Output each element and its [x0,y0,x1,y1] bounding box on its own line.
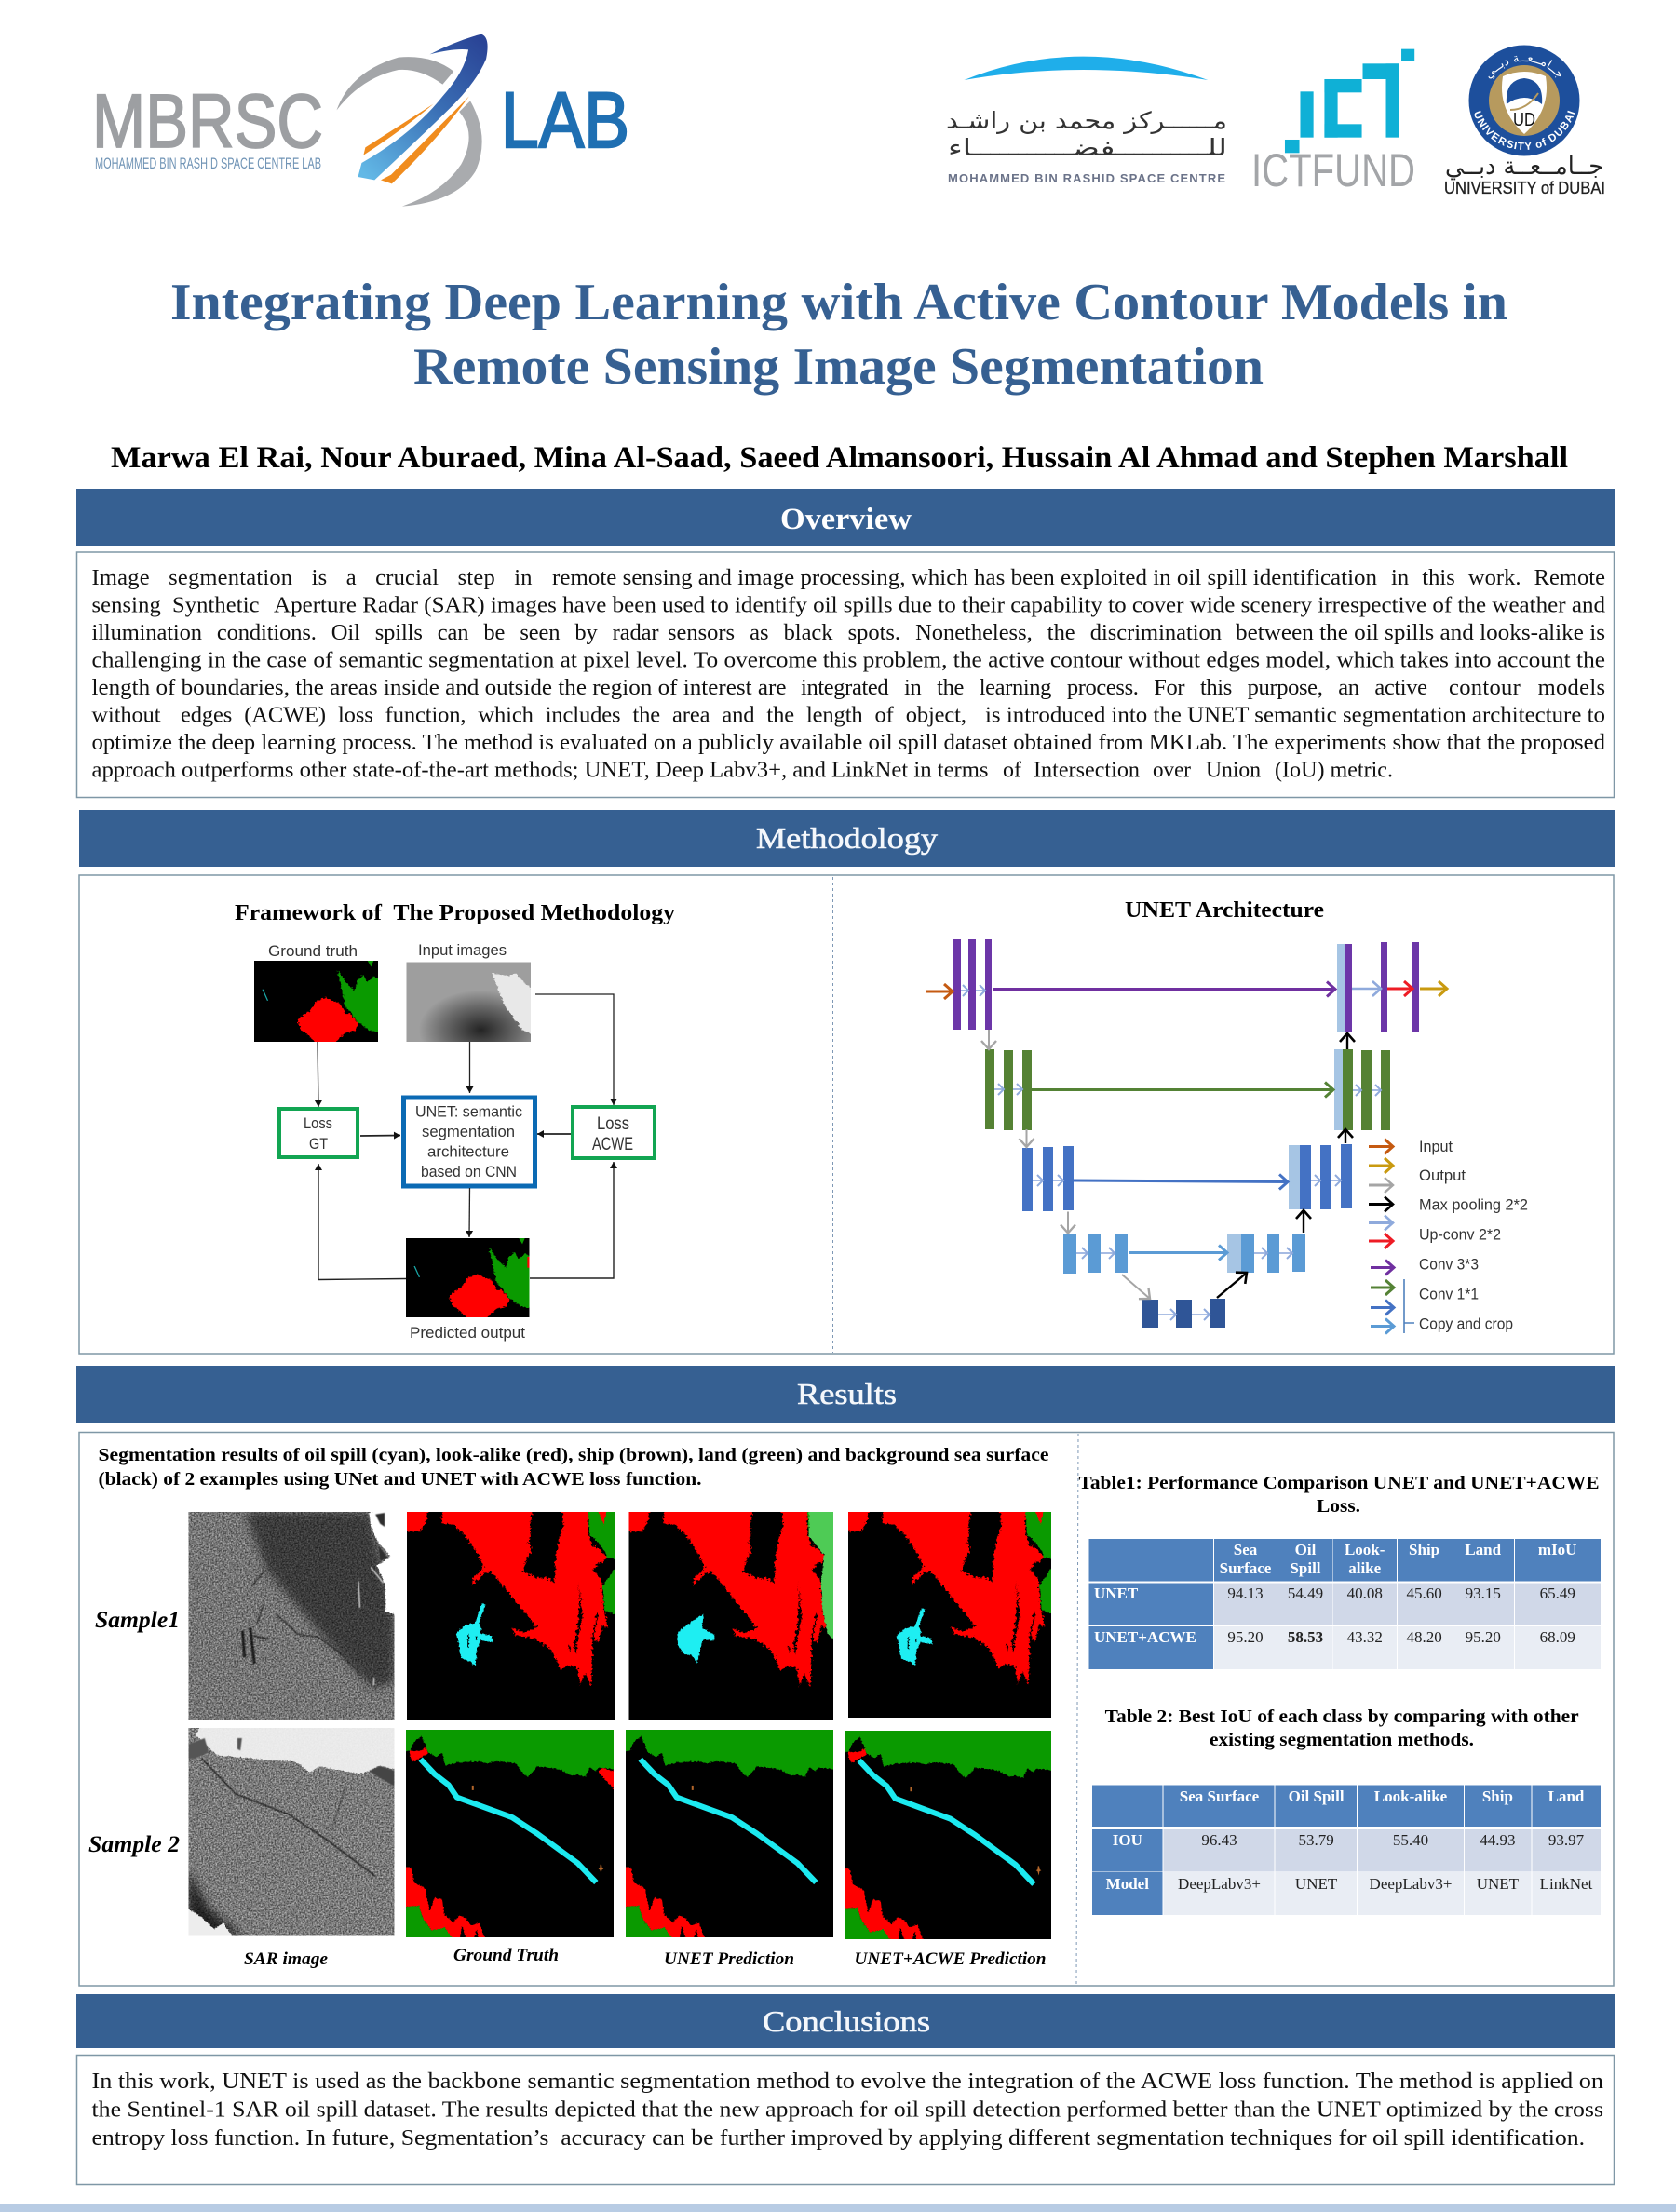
panel: overview text: challenging in the case of semantic segmentation at pixel level. To overcome this problem, the active contour without edges model, which takes into account the [91,648,1605,672]
panel: conclusions text: In this work, UNET is used as the backbone semantic segmentation method to evolve the integration of the ACWE loss function. The method is applied on [91,2069,1603,2094]
diagram: UNET architecture [926,939,1528,1333]
caption: segmentation results [99,1445,1048,1490]
panel: overview text: remote sensing and image processing, which has been exploited in oil spill identification [552,565,1377,590]
image: input SAR image [406,963,531,1042]
labels: image columns: UNET+ACWE Prediction [855,1949,1047,1969]
label: predicted output: Predicted output [410,1324,525,1342]
table 1: performance comparison: UNET [1094,1585,1139,1602]
panel: overview text [76,552,1615,797]
panel: overview text: between the oil spills and looks-alike is [1236,620,1605,645]
title: Remote Sensing Image Segmentation [413,338,1264,396]
panel: overview text: integrated in the learning process. For this purpose, an active [801,675,1427,700]
logo: University of Dubai: UNIVERSITY of DUBAI [1475,110,1575,150]
box: Loss ACWE: Loss [597,1114,629,1134]
box: UNET semantic segmentation architecture [404,1098,534,1186]
table 2: best IoU of each class: Look-alike [1374,1787,1448,1805]
table 2: best IoU of each class: 93.97 [1548,1831,1585,1849]
table 2: best IoU of each class: Model [1106,1875,1149,1893]
image: sample 2 UNET prediction [626,1730,833,1937]
labels: image columns: Ground Truth [453,1946,559,1965]
logo: Mohammed Bin Rashid Space Centre [946,57,1227,185]
panel: conclusions text: entropy loss function. In future, Segmentation’s accuracy can be further improved by applying different segmentation techniques for oil spill identification. [91,2125,1585,2151]
logo: MBRSC Lab [92,34,629,207]
table 2: best IoU of each class: 55.40 [1393,1831,1428,1849]
panel: overview text: sensors as black spots. Nonetheless, the discrimination [668,620,1222,645]
caption: segmentation results: (black) of 2 examples using UNet and UNET with ACWE loss function. [99,1469,702,1490]
logo: Mohammed Bin Rashid Space Centre: للــــــــــفضـــــــــــاء [948,134,1227,161]
authors: Marwa El Rai, Nour Aburaed, Mina Al-Saad, Saeed Almansoori, Hussain Al Ahmad and Stephen Marshall [111,441,1568,475]
caption: segmentation results: Segmentation results of oil spill (cyan), look-alike (red), ship (brown), land (green) and background sea surface [99,1445,1048,1465]
logo: MBRSC Lab: MOHAMMED BIN RASHID SPACE CENTRE LAB [95,155,321,172]
legend [1369,1138,1528,1333]
table 1: performance comparison: 54.49 [1288,1585,1323,1602]
table 2: best IoU of each class: LinkNet [1540,1875,1593,1893]
legend: Up-conv 2*2 [1419,1225,1501,1244]
box: UNET semantic segmentation architecture: architecture [427,1143,509,1160]
table 2: best IoU of each class: Oil Spill [1289,1787,1345,1805]
table 1: performance comparison: 43.32 [1347,1628,1383,1646]
table 2: best IoU of each class: 44.93 [1480,1831,1516,1849]
heading: table 2: existing segmentation methods. [1210,1730,1474,1750]
heading: table 2: Table 2: Best IoU of each class by comparing with other [1105,1706,1579,1727]
legend: Copy and crop [1419,1315,1513,1333]
legend: Conv 3*3 [1419,1255,1479,1274]
panel: conclusions heading: Conclusions [763,2004,930,2038]
table 1: performance comparison: 93.15 [1466,1585,1501,1602]
bars: bottleneck [1142,1299,1225,1328]
panel: results heading: Results [797,1377,897,1410]
table 1: performance comparison: Land [1465,1541,1502,1558]
panel: conclusions text: the Sentinel-1 SAR oil spill dataset. The results depicted that the new approach for oil spill detection performed better than the UNET optimized by the cross [91,2097,1603,2123]
table 1: performance comparison: 95.20 [1227,1628,1264,1646]
panel: overview text: over [1153,758,1191,782]
panel: methodology frame [79,875,1614,1354]
image: predicted output [406,1238,529,1317]
panel: results frame [79,1432,1614,1986]
table 2: best IoU of each class: DeepLabv3+ [1178,1875,1261,1893]
box: Loss ACWE [573,1107,655,1158]
table 1: performance comparison: Oil [1295,1541,1317,1558]
table 1: performance comparison: 48.20 [1406,1628,1442,1646]
table 1: performance comparison: 65.49 [1540,1585,1575,1602]
logo: ICT Fund [1251,49,1415,196]
panel: overview text: Image segmentation is a crucial step in [91,565,533,590]
table 1: performance comparison: 94.13 [1227,1585,1264,1602]
table 1: performance comparison: 95.20 [1466,1628,1501,1646]
arrows: UNET flow [926,989,1447,1315]
table 1: performance comparison: 45.60 [1406,1585,1442,1602]
table 2: best IoU of each class: 96.43 [1201,1831,1237,1849]
box: Loss ACWE: ACWE [592,1135,633,1154]
table 1: performance comparison: alike [1348,1559,1382,1577]
panel: overview text: contour models [1449,675,1605,700]
heading: framework: Framework of The Proposed Methodology [235,901,675,925]
panel: overview text: (IoU) metric. [1275,758,1393,782]
table 1: performance comparison: 40.08 [1347,1585,1383,1602]
legend: Output [1419,1167,1466,1184]
table 1: performance comparison: mIoU [1538,1541,1576,1558]
panel: overview text: edges (ACWE) loss function, which includes the area and the length of object, [181,702,966,728]
footer band [0,2204,1676,2212]
panel: overview text: of [1003,758,1022,782]
heading: table 2 [1105,1706,1579,1750]
table 2: best IoU of each class: UNET [1295,1875,1338,1893]
panel: overview text: in this work. Remote [1391,565,1605,590]
logo: ICT Fund: ICTFUND [1251,144,1415,196]
logo: MBRSC Lab: MBRSC [92,79,323,164]
logo: University of Dubai [1444,45,1605,197]
label: ground truth: Ground truth [268,942,358,960]
box: UNET semantic segmentation architecture: based on CNN [421,1163,517,1180]
arrows: framework flow [318,994,614,1279]
panel: conclusions text [76,2056,1615,2184]
table 1: performance comparison [1089,1539,1601,1669]
panel: methodology heading: Methodology [756,821,938,855]
logo: University of Dubai: UD [1513,110,1535,130]
panel: results heading [76,1366,1615,1423]
panel: overview text: illumination conditions. Oil spills can be seen by radar [91,620,659,645]
table 1: performance comparison: Ship [1409,1541,1439,1558]
image: sample 1 SAR [188,1512,395,1720]
table 2: best IoU of each class: UNET [1477,1875,1520,1893]
image: sample 1 UNET prediction [629,1512,833,1720]
legend: Conv 1*1 [1419,1285,1479,1303]
table 1: performance comparison: UNET+ACWE [1094,1628,1196,1646]
panel: overview heading [76,489,1615,546]
table 1: performance comparison: Sea [1234,1541,1258,1558]
box: UNET semantic segmentation architecture: UNET: semantic [415,1102,522,1121]
bars: level 2 [985,1049,1390,1130]
panel: overview text: length of boundaries, the areas inside and outside the region of interest are [91,675,787,700]
table 2: best IoU of each class: Sea Surface [1180,1787,1260,1805]
panel: overview text: Union [1206,758,1261,782]
image: sample 2 SAR [188,1728,395,1936]
box: Loss GT: Loss [304,1114,332,1132]
heading: table 1: Loss. [1317,1496,1360,1517]
logo: Mohammed Bin Rashid Space Centre: MOHAMMED BIN RASHID SPACE CENTRE [948,171,1225,185]
image: sample 1 ground truth [407,1512,615,1720]
diagram: framework of the proposed methodology [254,941,655,1342]
table 1: performance comparison: Look- [1345,1541,1385,1558]
legend: Input [1419,1138,1453,1155]
heading: UNET architecture: UNET Architecture [1125,898,1324,923]
panel: methodology heading [79,810,1615,867]
image: sample 1 UNET+ACWE prediction [848,1512,1051,1718]
title [170,274,1507,396]
panel: overview text: is introduced into the UNET semantic segmentation architecture to [985,702,1605,728]
logo: University of Dubai: جــامــعــة دبــي [1445,153,1603,181]
bars: level 3 [1022,1144,1352,1211]
box: Loss GT: GT [309,1135,328,1153]
logo: University of Dubai: جــامــعــة دبــي [1488,56,1561,79]
labels: image columns [244,1946,1047,1969]
panel: conclusions heading [76,1994,1615,2048]
table 1: performance comparison: Surface [1220,1559,1272,1577]
legend: Max pooling 2*2 [1419,1195,1528,1214]
logo: Mohammed Bin Rashid Space Centre: مــــــركز محمد بن راشـد [946,107,1227,134]
logo: University of Dubai: UNIVERSITY of DUBAI [1444,179,1605,197]
table 1: performance comparison: 58.53 [1288,1628,1323,1646]
table 1: performance comparison: 68.09 [1540,1628,1575,1646]
panel: overview text: Intersection [1034,758,1140,782]
label: Sample1: Sample1 [95,1608,180,1633]
image: ground truth mask [254,961,378,1042]
box: Loss GT [279,1109,358,1157]
table 1: performance comparison: Spill [1290,1559,1321,1577]
image: sample 2 ground truth [406,1730,614,1937]
bars: level 4 [1063,1234,1305,1274]
panel: overview text: approach outperforms other state-of-the-art methods; UNET, Deep Labv3+, and LinkNet in terms [91,758,989,782]
labels: image columns: UNET Prediction [664,1949,794,1969]
bars: level 1 [953,939,1419,1032]
image: sample 2 UNET+ACWE prediction [845,1731,1051,1939]
table 2: best IoU of each class: DeepLabv3+ [1370,1875,1452,1893]
label: Sample 2: Sample 2 [88,1832,180,1857]
labels: image columns: SAR image [244,1949,329,1969]
table 2: best IoU of each class [1092,1786,1601,1915]
panel: overview text: sensing Synthetic [91,592,260,618]
heading: table 1: Table1: Performance Comparison UNET and UNET+ACWE [1078,1473,1600,1493]
panel: overview text: Aperture Radar (SAR) images have been used to identify oil spills due to their capability to cover wide scenery irrespective of the weather and [274,592,1605,618]
logo: MBRSC Lab: LAB [501,76,629,164]
panel: overview heading: Overview [780,503,912,536]
table 2: best IoU of each class: 53.79 [1298,1831,1334,1849]
table 2: best IoU of each class: Land [1548,1787,1585,1805]
title: Integrating Deep Learning with Active Contour Models in [170,274,1507,331]
panel: overview text: without [91,702,161,728]
label: input images: Input images [418,941,507,959]
box: UNET semantic segmentation architecture: segmentation [422,1123,515,1140]
table 2: best IoU of each class: Ship [1482,1787,1513,1805]
heading: table 1 [1078,1473,1600,1517]
table 2: best IoU of each class: IOU [1113,1831,1142,1849]
panel: overview text: optimize the deep learning process. The method is evaluated on a publicly available oil spill dataset obtained from MKLab. The experiments show that the proposed [91,730,1605,755]
